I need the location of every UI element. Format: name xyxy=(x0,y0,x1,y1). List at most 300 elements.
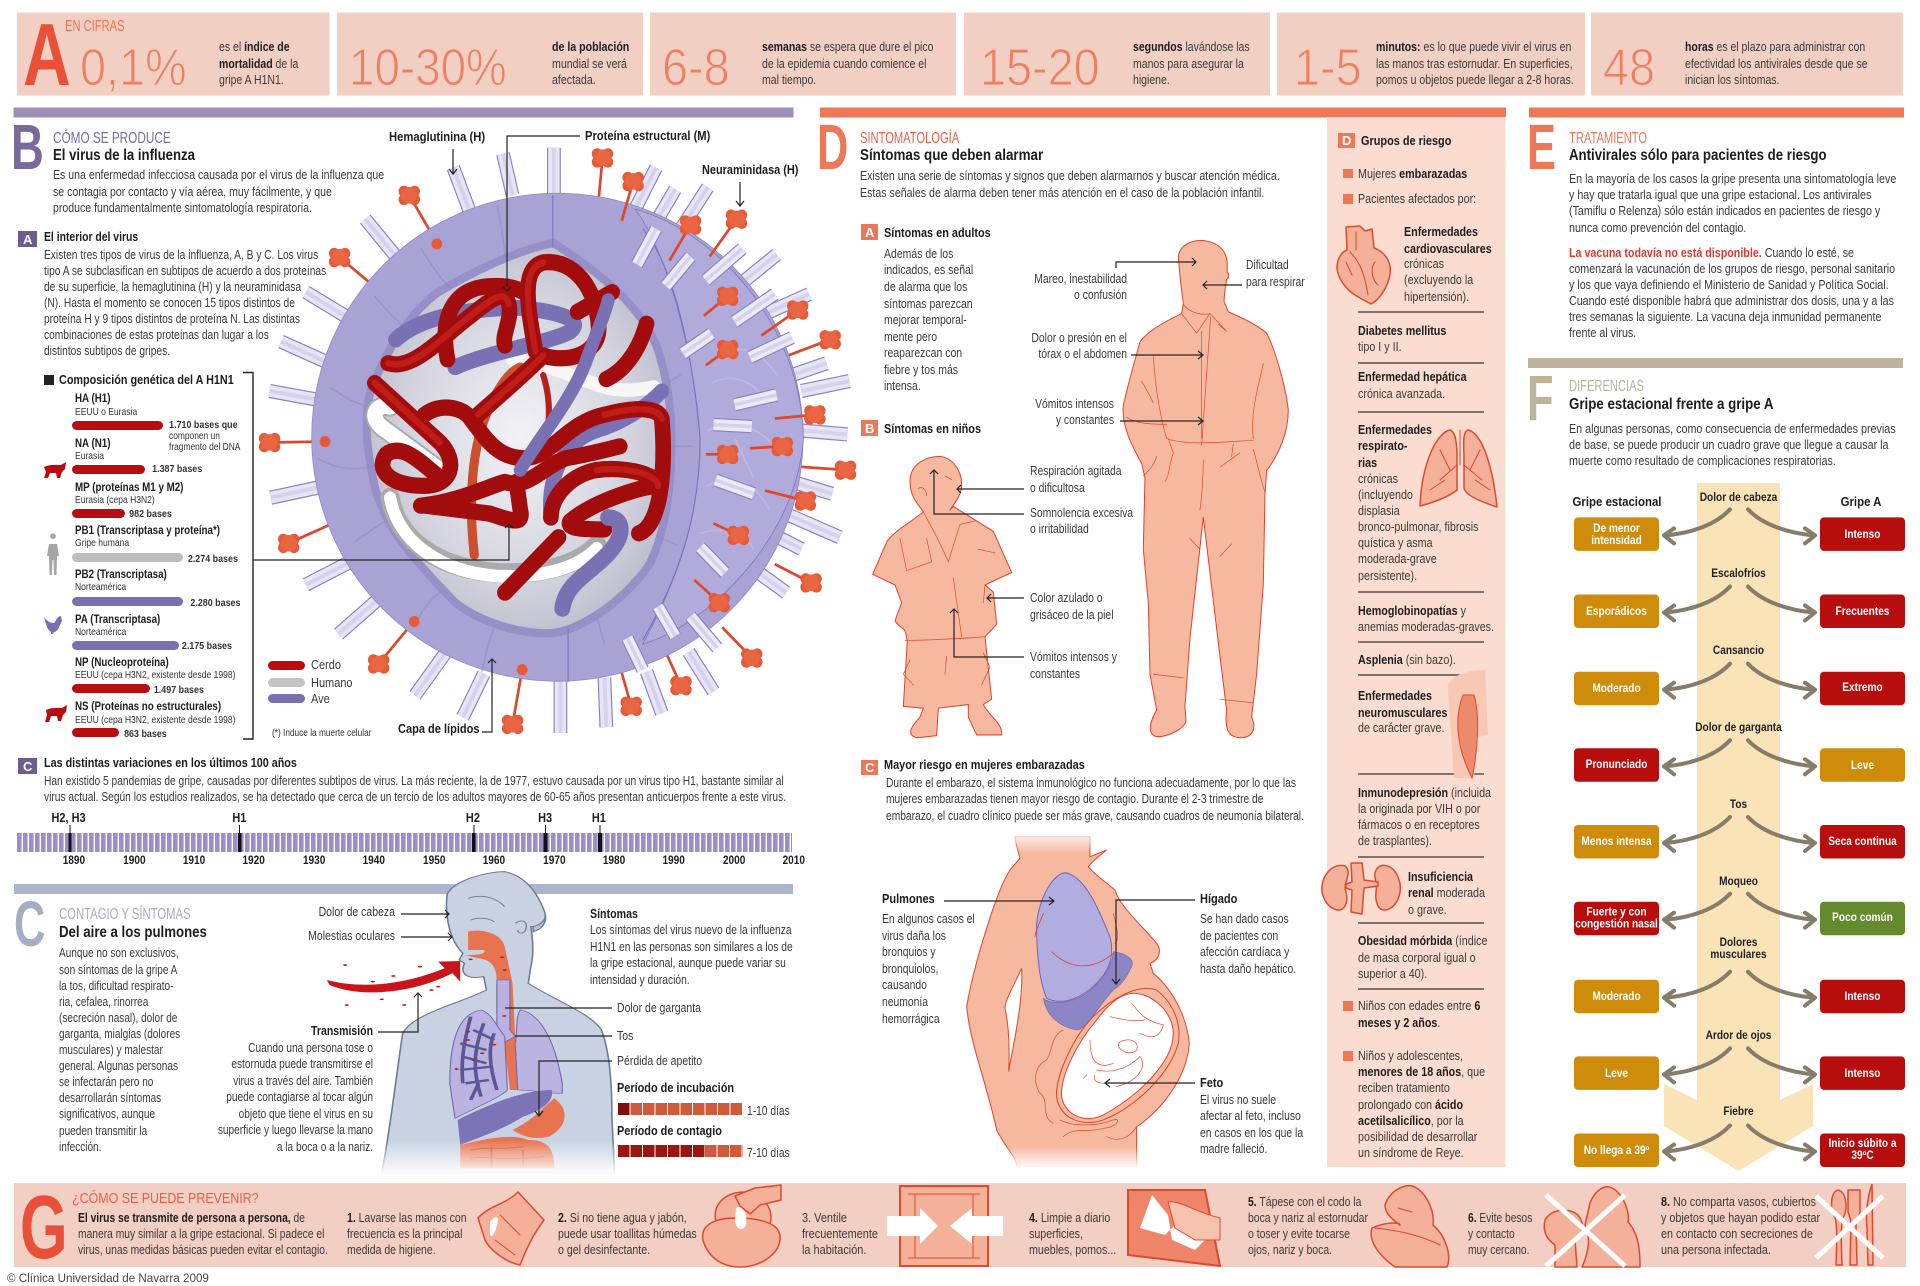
legend: Cerdo xyxy=(311,658,341,672)
timeline: H1 xyxy=(232,810,247,825)
comparison chart: Dolor de garganta xyxy=(1695,721,1783,734)
stat 0,1%: gripe A H1N1. xyxy=(219,74,284,87)
woman callouts: de pacientes con xyxy=(1200,930,1278,943)
respiratory labels: la gripe estacional, aunque puede variar su xyxy=(590,957,786,970)
panel D sidebar background xyxy=(1327,117,1506,1167)
timeline: H2 xyxy=(466,810,480,825)
panel: grupos de riesgo: Niños con edades entre 6 xyxy=(1358,999,1481,1013)
panel E: tratamiento: Cuando esté disponible habrá que administrar dos dosis, una y a las xyxy=(1569,294,1894,308)
panel: grupos de riesgo: de masa corporal igual o xyxy=(1358,951,1476,965)
intro xyxy=(78,1212,328,1257)
panel F: diferencias: de base, se puede producir un cuadro grave que llegue a causar la xyxy=(1569,438,1889,452)
panel E: tratamiento: y hay que tratarla igual que una gripe estacional. Los antivirales xyxy=(1569,188,1871,202)
comparison chart: Tos xyxy=(1730,798,1747,811)
gene composition chart: Eurasia xyxy=(75,450,105,462)
step 1: frecuencia es la principal xyxy=(347,1228,462,1241)
stat 0,1% xyxy=(80,39,299,97)
virus labels: Capa de lípidos xyxy=(398,721,480,736)
tag en cifras: EN CIFRAS xyxy=(65,17,125,34)
sub-block: el interior del virus: Existen tres tipos de virus de la influenza, A, B y C. Los virus xyxy=(44,249,318,262)
timeline: H3 xyxy=(538,810,552,825)
comparison chart: Leve xyxy=(1851,759,1874,772)
panel C heading and text: Del aire a los pulmones xyxy=(59,924,207,941)
figure callouts: Vómitos intensos xyxy=(1035,398,1114,411)
comparison chart: Fiebre xyxy=(1723,1105,1754,1118)
heading: ¿CÓMO SE PUEDE PREVENIR? xyxy=(72,1189,259,1206)
sub-block: variaciones: C xyxy=(23,759,33,774)
panel: grupos de riesgo: la originada por VIH o por xyxy=(1358,802,1480,816)
stat 15-20: manos para asegurar la xyxy=(1133,58,1244,71)
panel E: tratamiento: tres semanas la siguiente. La vacuna deja inmunidad permanente xyxy=(1569,310,1881,324)
legend: (*) Induce la muerte celular xyxy=(272,727,371,738)
gene composition chart: 2.175 bases xyxy=(182,640,233,652)
woman callouts: causando xyxy=(882,979,927,992)
panel F: diferencias: En algunas personas, como consecuencia de enfermedades previas xyxy=(1569,422,1896,436)
timeline: 1980 xyxy=(603,854,625,867)
stat 10-30%: mundial se verá xyxy=(552,57,627,71)
respiratory labels: puede contagiarse al tocar algún xyxy=(226,1091,373,1104)
gene composition chart: EEUU (cepa H3N2, existente desde 1998) xyxy=(75,669,236,681)
panel: grupos de riesgo: cardiovasculares xyxy=(1404,242,1492,256)
icon: wipes xyxy=(703,1185,781,1267)
comparison chart: Intenso xyxy=(1845,528,1881,541)
gene composition chart: Norteamérica xyxy=(75,581,127,593)
section bars xyxy=(14,108,1904,894)
panel: grupos de riesgo: un síndrome de Reye. xyxy=(1358,1146,1464,1160)
adult symptoms text: A xyxy=(865,225,875,240)
panel: grupos de riesgo: Inmunodepresión (incluida xyxy=(1358,786,1491,800)
timeline: 1920 xyxy=(242,854,265,867)
timeline: 1950 xyxy=(423,854,445,867)
gene composition chart: PB1 (Transcriptasa y proteína*) xyxy=(75,524,220,537)
sub-block: el interior del virus: (N). Hasta el momento se conocen 15 tipos distintos de xyxy=(44,297,295,310)
sub-block: el interior del virus xyxy=(18,230,326,358)
gene composition chart: Norteamérica xyxy=(75,626,127,638)
step 3: la habitación. xyxy=(802,1243,866,1257)
stat 48: efectividad los antivirales desde que se xyxy=(1685,58,1868,71)
respiratory labels: H1N1 en las personas son similares a los de xyxy=(590,941,793,954)
timeline: H2, H3 xyxy=(52,810,86,825)
panel D heading: SINTOMATOLOGÍA xyxy=(860,129,959,146)
gene composition chart: EEUU (cepa H3N2, existente desde 1998) xyxy=(75,714,236,726)
comparison chart: Frecuentes xyxy=(1836,605,1889,618)
panel: grupos de riesgo: moderada-grave xyxy=(1358,552,1437,566)
virus labels: Proteína estructural (M) xyxy=(585,128,710,143)
stat 1-5: minutos: es lo que puede vivir el virus en xyxy=(1376,41,1571,54)
sub-block: el interior del virus: tipo A se subclasifican en subtipos de acuerdo a dos proteínas xyxy=(44,265,326,278)
adult symptoms text: Síntomas en niños xyxy=(884,421,981,436)
red ribbons xyxy=(375,262,663,593)
respiratory labels: virus a través del aire. También xyxy=(233,1075,373,1088)
figure callouts: tórax o el abdomen xyxy=(1038,348,1127,361)
sub-block: variaciones: Las distintas variaciones en los últimos 100 años xyxy=(44,755,297,770)
step 3: 3. Ventile xyxy=(802,1211,847,1225)
step 2: o gel desinfectante. xyxy=(558,1243,650,1257)
comparison chart: Dolores xyxy=(1720,936,1757,949)
comparison chart: De menor xyxy=(1593,522,1641,535)
letter G: G xyxy=(20,1177,68,1278)
icon: heart xyxy=(1337,226,1390,304)
icon: elbow xyxy=(1371,1186,1449,1267)
adult symptoms text xyxy=(861,224,991,436)
panel E: tratamiento: TRATAMIENTO xyxy=(1569,129,1647,146)
woman callouts: En algunos casos el xyxy=(882,913,975,926)
panel: grupos de riesgo: superior a 40). xyxy=(1358,967,1427,981)
comparison chart: Moqueo xyxy=(1719,875,1758,888)
sub-block: el interior del virus: proteína H y 9 tipos distintos de proteína N. Las distintas xyxy=(44,313,300,326)
panel: grupos de riesgo: anemias moderadas-graves. xyxy=(1358,620,1494,634)
timeline: 1960 xyxy=(483,854,505,867)
step 2: 2. Si no tiene agua y jabón, xyxy=(558,1211,687,1225)
incubation squares xyxy=(618,1103,743,1151)
panel: grupos de riesgo: Pacientes afectados por: xyxy=(1358,192,1476,206)
pregnant women section: embarazo, el cuadro clínico puede ser más grave, causando cuadros de neumonía bilateral. xyxy=(886,810,1304,823)
icon: cleaning xyxy=(1128,1190,1220,1266)
comparison chart: Leve xyxy=(1605,1067,1628,1080)
comparison chart: Ardor de ojos xyxy=(1706,1029,1771,1042)
gene composition chart: NA (N1) xyxy=(75,437,111,450)
comparison chart: Esporádicos xyxy=(1586,605,1647,618)
woman callouts: Hígado xyxy=(1200,891,1237,906)
pregnant women section: C xyxy=(865,760,875,775)
panel: grupos de riesgo: (excluyendo la xyxy=(1404,273,1474,287)
step 2: puede usar toallitas húmedas xyxy=(558,1227,697,1241)
panel: grupos de riesgo: persistente). xyxy=(1358,569,1417,583)
panel: grupos de riesgo: crónicas xyxy=(1358,472,1398,486)
panel E: tratamiento xyxy=(1527,110,1896,340)
panel: grupos de riesgo: Insuficiencia xyxy=(1408,870,1474,884)
woman callouts: El virus no suele xyxy=(1200,1094,1276,1107)
panel F: diferencias: muerte como resultado de complicaciones respiratorias. xyxy=(1569,454,1836,468)
woman callouts xyxy=(882,891,1304,1156)
sub-block: el interior del virus: A xyxy=(23,232,33,247)
comparison chart: No llega a 39º xyxy=(1584,1144,1649,1157)
illustration: respiratory system xyxy=(327,872,622,1175)
step 6 xyxy=(1468,1212,1533,1257)
panel: grupos de riesgo: Enfermedades xyxy=(1358,423,1432,437)
stat 10-30%: afectada. xyxy=(552,73,596,87)
panel D heading xyxy=(817,110,1280,200)
timeline: 1890 xyxy=(63,854,85,867)
figure callouts: Dolor o presión en el xyxy=(1031,332,1127,345)
panel C heading and text: Aunque no son exclusivos, xyxy=(59,947,179,960)
step 4: superficies, xyxy=(1029,1227,1083,1241)
figure callouts: Vómitos intensos y xyxy=(1030,651,1117,664)
icon: pig 2 xyxy=(45,705,67,722)
comparison chart: congestión nasal xyxy=(1575,918,1658,931)
respiratory labels: a la boca o a la nariz. xyxy=(277,1141,373,1154)
adult symptoms text: síntomas parezcan xyxy=(884,298,973,311)
sub-block: el interior del virus: de su superficie, la hemaglutinina (H) y la neuraminidasa xyxy=(44,281,302,294)
pregnant women section xyxy=(861,757,1304,823)
gene composition chart: HA (H1) xyxy=(75,392,111,405)
timeline: 1900 xyxy=(123,854,146,867)
step 5: boca y nariz al estornudar xyxy=(1248,1212,1368,1225)
figure callouts: Dificultad xyxy=(1246,259,1289,272)
step 8 xyxy=(1661,1195,1820,1257)
panel: grupos de riesgo: rias xyxy=(1358,456,1377,470)
icon: kiss xyxy=(1544,1187,1640,1267)
panel B heading: El virus de la influenza xyxy=(53,147,196,164)
step 6: muy cercano. xyxy=(1468,1244,1529,1257)
comparison chart: Escalofríos xyxy=(1711,567,1766,580)
icon: hands xyxy=(478,1192,544,1265)
woman callouts: bronquios y xyxy=(882,946,936,959)
panel: grupos de riesgo: D xyxy=(1342,133,1351,148)
step 5: ojos, nariz y boca. xyxy=(1248,1244,1332,1257)
gene composition chart: componen un xyxy=(169,430,220,442)
stat 15-20: higiene. xyxy=(1133,74,1170,87)
timeline: 1910 xyxy=(183,854,205,867)
gene composition chart: NS (Proteínas no estructurales) xyxy=(75,700,221,713)
respiratory labels: Transmisión xyxy=(311,1023,373,1038)
icon: pig xyxy=(44,462,66,478)
panel E: tratamiento: En la mayoría de los casos la gripe presenta una sintomatología leve xyxy=(1569,172,1896,186)
comparison chart: Seca continua xyxy=(1828,835,1898,848)
stat 48: horas es el plazo para administrar con xyxy=(1685,41,1865,54)
stat 6-8: mal tiempo. xyxy=(762,74,816,87)
pregnant women section: mujeres embarazadas tienen mayor riesgo de contagio. Durante el 2-3 trimestre de xyxy=(886,793,1263,806)
figure callouts: para respirar xyxy=(1246,276,1305,289)
legend: Humano xyxy=(311,676,353,690)
respiratory labels: Dolor de garganta xyxy=(617,1002,702,1015)
stat 15-20 xyxy=(980,39,1250,97)
woman callouts: neumonía xyxy=(882,996,929,1009)
figure callouts: o confusión xyxy=(1074,289,1127,302)
woman callouts: Feto xyxy=(1200,1075,1223,1090)
stat 6-8 xyxy=(662,39,933,97)
illustration: man and child xyxy=(873,240,1288,738)
woman callouts: hasta daño hepático. xyxy=(1200,963,1296,976)
stat 6-8: 6-8 xyxy=(662,39,730,97)
respiratory labels: Síntomas xyxy=(590,906,638,921)
panel F: diferencias: Gripe estacional frente a gripe A xyxy=(1569,396,1774,413)
comparison chart: Cansancio xyxy=(1713,644,1764,657)
sub-block: variaciones: virus actual. Según los estudios realizados, se ha detectado que cerca de un tercio de los adultos mayores de 60-65 años presentan anticuerpos frente a este virus. xyxy=(44,791,786,804)
comparison chart: Poco común xyxy=(1832,911,1893,924)
figure callouts xyxy=(930,258,1305,681)
step 1: 1. Lavarse las manos con xyxy=(347,1212,467,1225)
panel F: diferencias: F xyxy=(1527,361,1554,434)
respiratory labels: 1-10 días xyxy=(747,1105,790,1118)
intro: El virus se transmite de persona a persona, de xyxy=(78,1212,305,1225)
gene composition chart: PB2 (Transcriptasa) xyxy=(75,568,167,581)
comparison chart: Moderado xyxy=(1592,682,1641,695)
gene composition chart: PA (Transcriptasa) xyxy=(75,613,161,626)
gene composition chart: Gripe humana xyxy=(75,537,130,549)
stat 0,1%: 0,1% xyxy=(80,39,187,97)
panel F: diferencias: DIFERENCIAS xyxy=(1569,377,1644,394)
woman callouts: afección cardíaca y xyxy=(1200,946,1289,959)
step 5: o toser y evite tocarse xyxy=(1248,1228,1350,1241)
panel: grupos de riesgo: o grave. xyxy=(1408,903,1447,917)
sub-block: el interior del virus: El interior del virus xyxy=(44,230,139,244)
woman callouts: bronquiolos, xyxy=(882,963,938,976)
panel C heading and text: C xyxy=(14,887,45,960)
icon: cutlery xyxy=(1816,1184,1883,1265)
panel: grupos de riesgo: Enfermedad hepática xyxy=(1358,370,1467,384)
stat 15-20: segundos lavándose las xyxy=(1133,41,1250,54)
timeline: 1990 xyxy=(662,854,685,867)
gene composition chart: Composición genética del A H1N1 xyxy=(59,372,234,387)
panel F: diferencias xyxy=(1527,361,1896,468)
figure callouts: o dificultosa xyxy=(1030,482,1085,495)
gene composition chart: 1.710 bases que xyxy=(169,419,238,431)
panel E: tratamiento: La vacuna todavía no está disponible. Cuando lo esté, se xyxy=(1569,246,1854,260)
gene composition chart: 2.274 bases xyxy=(188,553,238,565)
panel C heading and text: infección. xyxy=(59,1141,101,1154)
timeline: 2000 xyxy=(723,854,745,867)
step 2 xyxy=(558,1211,697,1257)
step 4 xyxy=(1029,1211,1116,1257)
stat 48 xyxy=(1603,39,1868,97)
panel: grupos de riesgo: quística y asma xyxy=(1358,536,1433,550)
gene composition chart: 2.280 bases xyxy=(190,597,241,609)
comparison chart: intensidad xyxy=(1591,534,1642,547)
step 8: una persona infectada. xyxy=(1661,1243,1771,1257)
step 5 xyxy=(1248,1196,1368,1257)
virus labels xyxy=(253,128,798,736)
copyright: © Clínica Universidad de Navarra 2009 xyxy=(7,1271,209,1285)
stat 1-5 xyxy=(1294,39,1574,97)
panel B heading: CÓMO SE PRODUCE xyxy=(53,128,171,146)
intro: manera muy similar a la gripe estacional. Si padece el xyxy=(78,1228,324,1241)
gene composition chart: NP (Nucleoproteína) xyxy=(75,656,169,669)
figure callouts: Color azulado o xyxy=(1030,592,1103,605)
panel: grupos de riesgo: Asplenia (sin bazo). xyxy=(1358,653,1456,667)
panel A: en cifras xyxy=(17,7,1903,104)
woman callouts: afectar al feto, incluso xyxy=(1200,1110,1301,1123)
adult symptoms text: de alarma que los xyxy=(884,281,968,294)
woman callouts: hemorrágica xyxy=(882,1013,940,1026)
panel: grupos de riesgo: posibilidad de desarrollar xyxy=(1358,1130,1477,1144)
step 3: frecuentemente xyxy=(802,1227,878,1241)
virus labels: Hemaglutinina (H) xyxy=(389,129,485,144)
timeline: 2010 xyxy=(783,854,805,867)
stat 1-5: pomos u objetos puede llegar a 2-8 horas. xyxy=(1376,74,1574,87)
gene composition chart: EEUU o Eurasia xyxy=(75,406,138,418)
panel C heading and text: pueden transmitir la xyxy=(59,1125,148,1138)
panel C heading and text: significativos, aunque xyxy=(59,1108,155,1121)
sub-block: variaciones: Han existido 5 pandemias de gripe, causadas por diferentes subtipos de virus. La más reciente, la de 1977, estuvo causada por un virus tipo H1, bastante similar al xyxy=(44,775,784,788)
woman callouts: Pulmones xyxy=(882,891,935,906)
step 1 xyxy=(347,1212,467,1257)
stat 48: inician los síntomas. xyxy=(1685,74,1779,87)
panel B heading xyxy=(11,111,384,215)
legend: Ave xyxy=(311,692,330,706)
panel C heading and text: ria, cefalea, rinorrea xyxy=(59,996,149,1009)
adult symptoms text: fiebre y tos más xyxy=(884,364,958,377)
adult symptoms text: B xyxy=(865,421,874,436)
step 6: 6. Evite besos xyxy=(1468,1212,1533,1225)
panel: grupos de riesgo: Obesidad mórbida (índice xyxy=(1358,934,1487,948)
step 8: 8. No comparta vasos, cubiertos xyxy=(1661,1195,1816,1209)
timeline: 1970 xyxy=(543,854,566,867)
panel E: tratamiento: (Tamiflu o Relenza) sólo están indicados en pacientes de riesgo y xyxy=(1569,204,1880,218)
woman callouts: virus daña los xyxy=(882,930,946,943)
respiratory labels: Período de contagio xyxy=(617,1123,722,1138)
comparison chart: Intenso xyxy=(1845,990,1881,1003)
panel C heading and text: se infectarán pero no xyxy=(59,1076,153,1089)
panel: grupos de riesgo: menores de 18 años, que xyxy=(1358,1065,1485,1079)
intro: virus, unas medidas básicas pueden evitar el contagio. xyxy=(78,1244,328,1257)
man xyxy=(1123,240,1288,738)
step 8: en contacto con secreciones de xyxy=(1661,1227,1813,1241)
comparison chart: Extremo xyxy=(1842,681,1883,694)
step 4: muebles, pomos... xyxy=(1029,1243,1116,1257)
panel E: tratamiento: comenzará la vacunación de los grupos de riesgo, personal sanitario xyxy=(1569,262,1895,276)
panel: grupos de riesgo: Hemoglobinopatías y xyxy=(1358,604,1466,618)
gene composition chart: fragmento del DNA xyxy=(169,441,241,453)
panel: grupos de riesgo: Enfermedades xyxy=(1358,689,1432,703)
stat 10-30%: 10-30% xyxy=(349,39,507,97)
panel B heading: produce fundamentalmente sintomatología respiratoria. xyxy=(53,202,312,215)
respiratory labels: 7-10 días xyxy=(747,1147,790,1160)
comparison chart: 39ºC xyxy=(1851,1149,1874,1162)
panel E: tratamiento: frente al virus. xyxy=(1569,326,1636,340)
adult symptoms text: intensa. xyxy=(884,380,921,393)
panel C heading and text: garganta, mialgias (dolores xyxy=(59,1028,180,1041)
respiratory labels: Cuando una persona tose o xyxy=(248,1042,373,1055)
panel: grupos de riesgo: Enfermedades xyxy=(1404,225,1478,239)
stat 1-5: 1-5 xyxy=(1294,39,1362,97)
gene composition chart: Eurasia (cepa H3N2) xyxy=(75,494,155,506)
stat 0,1%: es el índice de xyxy=(219,41,290,54)
panel B heading: se contagia por contacto y vía aérea, muy fácilmente, y que xyxy=(53,186,332,199)
gene composition chart: 982 bases xyxy=(129,508,172,520)
letter A: A xyxy=(23,7,71,104)
adult symptoms text: mejorar temporal- xyxy=(884,314,967,327)
respiratory labels: Pérdida de apetito xyxy=(617,1055,702,1068)
comparison chart: Intenso xyxy=(1845,1067,1881,1080)
step 3 xyxy=(802,1211,878,1257)
panel B heading: Es una enfermedad infecciosa causada por el virus de la influenza que xyxy=(53,169,384,182)
comparison chart: Gripe A xyxy=(1841,494,1882,509)
adult symptoms text: Síntomas en adultos xyxy=(884,225,991,240)
respiratory labels: Tos xyxy=(617,1030,634,1043)
legend xyxy=(268,658,371,738)
pregnant women section: Durante el embarazo, el sistema inmunológico no funciona adecuadamente, por lo que las xyxy=(886,777,1296,790)
woman callouts: en casos en los que la xyxy=(1200,1127,1304,1140)
stat 15-20: 15-20 xyxy=(980,39,1100,97)
illustration: pregnant woman xyxy=(967,830,1189,1168)
icon: human xyxy=(47,533,59,575)
panel: grupos de riesgo: crónica avanzada. xyxy=(1358,387,1445,401)
panel: grupos de riesgo: respirato- xyxy=(1358,439,1408,453)
panel: grupos de riesgo: acetilsalicílico, por la xyxy=(1358,1114,1464,1128)
figure callouts: y constantes xyxy=(1056,414,1114,427)
adult symptoms text: mente pero xyxy=(884,331,937,344)
panel: grupos de riesgo xyxy=(1322,133,1497,1160)
panel: grupos de riesgo: (incluyendo xyxy=(1358,488,1413,502)
gene composition chart: 1.387 bases xyxy=(152,463,203,475)
panel C heading and text: son síntomas de la gripe A xyxy=(59,964,178,977)
gene composition chart: MP (proteínas M1 y M2) xyxy=(75,481,184,494)
panel C heading and text: CONTAGIO Y SÍNTOMAS xyxy=(59,905,191,922)
comparison chart: Inicio súbito a xyxy=(1828,1137,1897,1150)
gene composition chart: 863 bases xyxy=(124,728,167,740)
icon: arm muscle xyxy=(1448,670,1488,778)
adult symptoms text: reaparezcan con xyxy=(884,347,962,360)
sub-block: el interior del virus: distintos subtipos de gripes. xyxy=(44,345,170,358)
step 8: y objetos que hayan podido estar xyxy=(1661,1211,1820,1225)
panel C heading and text: musculares) y malestar xyxy=(59,1044,163,1057)
panel D heading: D xyxy=(817,110,848,183)
gene composition chart: 1.497 bases xyxy=(154,684,204,696)
ribbons behind xyxy=(375,406,440,470)
sub-block: variaciones xyxy=(18,755,786,804)
step 6: y contacto xyxy=(1468,1228,1515,1241)
